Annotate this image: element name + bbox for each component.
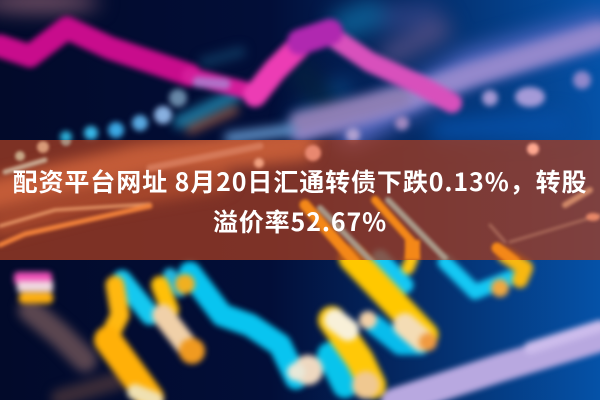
magenta line — [0, 28, 190, 75]
title: 溢价率52.67% — [213, 203, 387, 239]
title: 配资平台网址 8月20日汇通转债下跌0.13%，转股 — [13, 163, 587, 199]
lavender band — [395, 338, 600, 400]
title — [13, 163, 587, 239]
orange candles lower — [110, 285, 120, 335]
cyan dots — [60, 131, 72, 143]
banner streaks: chart marks showing through the strip — [0, 140, 600, 260]
banner: translucent orange-red strip — [0, 140, 600, 260]
cyan line lower — [122, 280, 150, 315]
